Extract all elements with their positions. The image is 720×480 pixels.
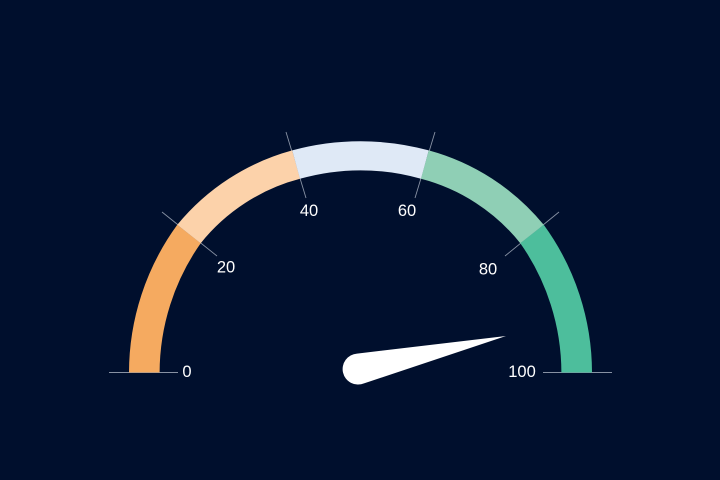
segment 20-40 <box>177 150 300 243</box>
segment 60-80 <box>421 150 544 243</box>
gauge arc <box>129 141 592 372</box>
label 100: 100 <box>508 363 536 381</box>
label 40: 40 <box>300 202 318 220</box>
segment 40-60 <box>292 141 429 179</box>
segment 80-100 <box>520 225 592 372</box>
label 0: 0 <box>182 363 192 381</box>
scale labels <box>182 202 536 381</box>
label 60: 60 <box>398 202 416 220</box>
label 20: 20 <box>217 259 235 277</box>
needle <box>343 336 506 385</box>
segment 0-20 <box>129 225 201 372</box>
label 80: 80 <box>479 260 497 278</box>
